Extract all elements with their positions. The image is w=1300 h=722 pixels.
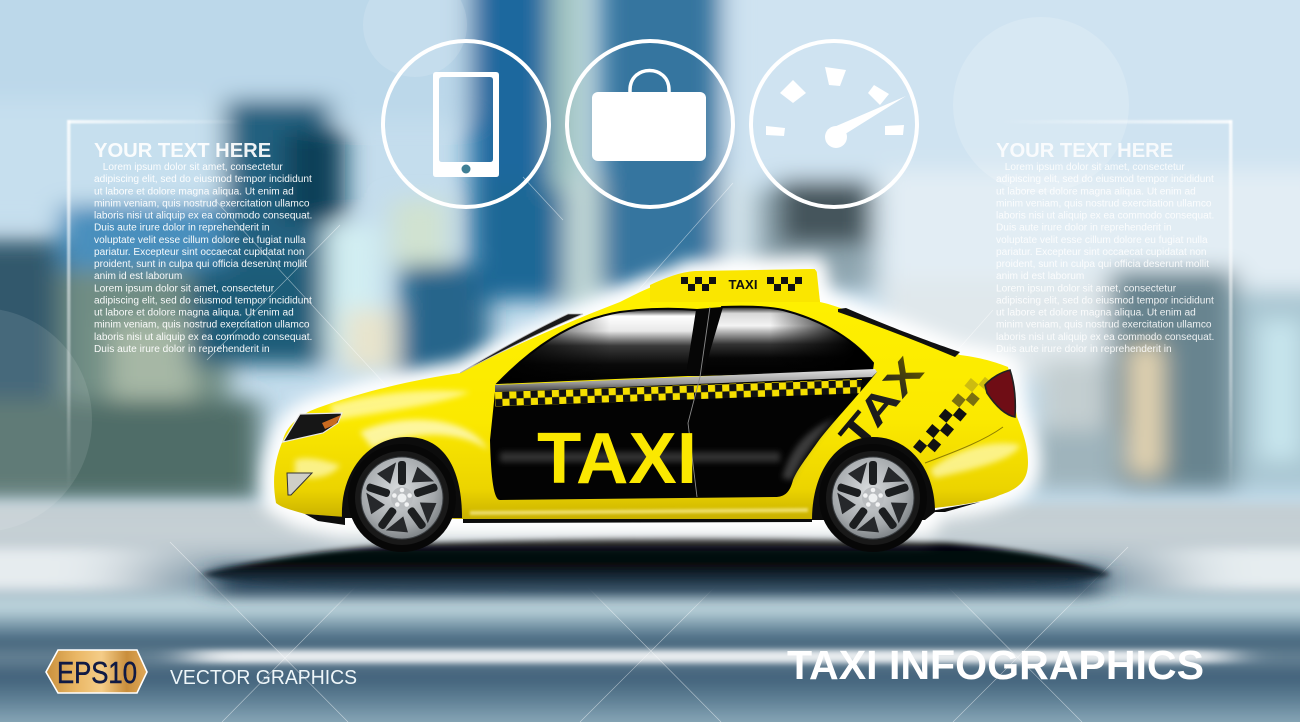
paragraph right: proident, sunt in culpa qui officia deserunt mollit: [996, 259, 1209, 270]
text block: left: [94, 140, 312, 355]
sign checks right: [767, 277, 802, 291]
heading right: YOUR TEXT HERE: [996, 140, 1173, 162]
door reflections: [500, 418, 835, 480]
rear arch: [812, 437, 935, 520]
rear window: [702, 307, 873, 375]
frame: right: [1000, 120, 1232, 490]
checker strip: [495, 379, 862, 406]
road shadow: [200, 538, 1111, 596]
paragraph right: laboris nisi ut aliquip ex ea commodo consequat.: [996, 332, 1214, 343]
title: TAXI INFOGRAPHICS: [787, 642, 1204, 688]
road: [0, 503, 1300, 722]
paragraph right: laboris nisi ut aliquip ex ea commodo consequat.: [996, 210, 1214, 222]
paragraph right: Lorem ipsum dolor sit amet, consectetur: [996, 283, 1177, 294]
black door panel: [490, 372, 877, 500]
sign checks left: [681, 277, 716, 291]
windscreen strip: [460, 314, 583, 373]
EPS10 badge: [46, 650, 147, 693]
icon: suitcase: [567, 41, 733, 207]
thin network lines: [170, 177, 1128, 722]
door text: TAXI: [537, 419, 697, 499]
paragraph right: pariatur. Excepteur sint occaecat cupidatat non: [996, 247, 1207, 258]
front arch: [342, 437, 462, 518]
paragraph left: Duis aute irure dolor in reprehenderit in: [94, 344, 270, 355]
rear checker stripe: [913, 370, 993, 460]
taxi car: [274, 269, 1028, 552]
rear crease: [925, 427, 1003, 463]
paragraph right: minim veniam, quis nostrud exercitation ullamco: [996, 198, 1212, 209]
paragraph right: ut labore et dolore magna aliqua. Ut enim ad: [996, 186, 1196, 197]
headlight: [283, 413, 342, 442]
paragraph left: ut labore et dolore magna aliqua. Ut enim ad: [94, 186, 294, 197]
label: vector graphics: VECTOR GRAPHICS: [170, 666, 357, 689]
car body: [274, 269, 1028, 519]
paragraph left: Lorem ipsum dolor sit amet, consectetur: [103, 162, 283, 173]
paragraph left: ut labore et dolore magna aliqua. Ut enim ad: [94, 308, 294, 319]
paragraph right: Duis aute irure dolor in reprehenderit in: [996, 223, 1172, 234]
tail light: [985, 370, 1015, 417]
fog lamp: [287, 473, 312, 495]
paragraph right: adipiscing elit, sed do eiusmod tempor incididunt: [996, 295, 1214, 306]
paragraph left: proident, sunt in culpa qui officia deserunt mollit: [94, 259, 307, 270]
paragraph left: [94, 162, 312, 355]
paragraph left: minim veniam, quis nostrud exercitation ullamco: [94, 320, 310, 331]
front wheel: [348, 444, 456, 552]
frame: left: [67, 120, 243, 490]
paragraph right: [996, 162, 1214, 355]
bright streak: [190, 650, 1230, 663]
sign text: TAXI: [728, 277, 758, 292]
pillar: [686, 307, 722, 376]
heading left: YOUR TEXT HERE: [94, 140, 271, 162]
underbody: [305, 502, 980, 525]
paragraph right: anim id est laborum: [996, 271, 1084, 282]
paragraph left: adipiscing elit, sed do eiusmod tempor incididunt: [94, 295, 312, 306]
chrome strip: [495, 369, 877, 392]
rear window strip: [838, 308, 960, 357]
paragraph left: anim id est laborum: [94, 271, 182, 282]
paragraph right: minim veniam, quis nostrud exercitation ullamco: [996, 320, 1212, 331]
paragraph left: Lorem ipsum dolor sit amet, consectetur: [94, 283, 275, 294]
paragraph left: laboris nisi ut aliquip ex ea commodo consequat.: [94, 332, 312, 343]
paragraph left: minim veniam, quis nostrud exercitation ullamco: [94, 198, 310, 209]
roof sign: [650, 269, 820, 302]
paragraph right: Duis aute irure dolor in reprehenderit in: [996, 344, 1172, 355]
paragraph left: laboris nisi ut aliquip ex ea commodo consequat.: [94, 210, 312, 222]
icon: smartphone: [383, 41, 549, 207]
paragraph right: ut labore et dolore magna aliqua. Ut enim ad: [996, 308, 1196, 319]
sill: [470, 508, 808, 515]
paragraph left: Duis aute irure dolor in reprehenderit in: [94, 223, 270, 234]
paragraph right: voluptate velit esse cillum dolore eu fugiat nulla: [996, 235, 1208, 246]
text block: right: [996, 140, 1214, 355]
front window: [498, 309, 697, 383]
paragraph left: voluptate velit esse cillum dolore eu fugiat nulla: [94, 235, 306, 246]
white halo: [274, 269, 1028, 525]
rear wheel: [819, 444, 927, 552]
hood highlights: [295, 391, 1020, 478]
paragraph left: adipiscing elit, sed do eiusmod tempor incididunt: [94, 174, 312, 185]
lens circles: [0, 0, 1129, 532]
paragraph right: Lorem ipsum dolor sit amet, consectetur: [1005, 162, 1185, 173]
rear door text: TAX: [831, 349, 932, 458]
paragraph right: adipiscing elit, sed do eiusmod tempor incididunt: [996, 174, 1214, 185]
icon: speedometer: [751, 41, 917, 207]
paragraph left: pariatur. Excepteur sint occaecat cupidatat non: [94, 247, 305, 258]
EPS10 badge: EPS10: [57, 655, 137, 690]
door seams: [688, 307, 710, 497]
